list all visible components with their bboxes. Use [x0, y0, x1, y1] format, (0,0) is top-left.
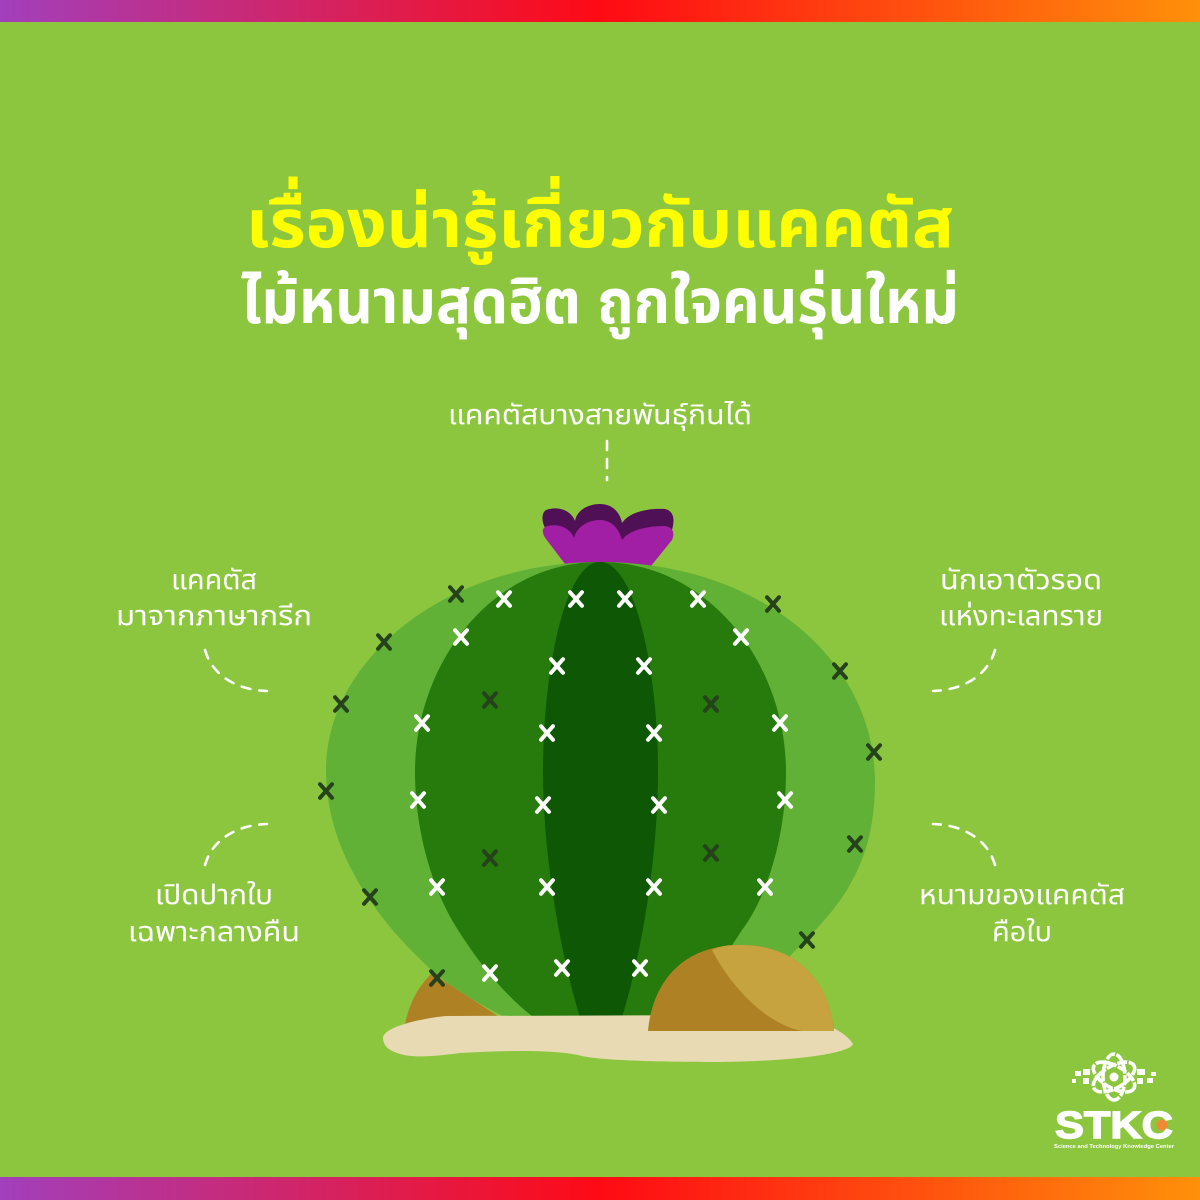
cactus body — [326, 562, 875, 1017]
logo wordmark: STKC — [1055, 1105, 1173, 1147]
logo accent dot — [1156, 1120, 1168, 1130]
icon: right rock — [648, 945, 834, 1031]
arrow: edible species — [606, 441, 608, 480]
white spines — [412, 592, 791, 980]
arrow: spines are leaves — [933, 824, 995, 865]
label: stomata open at night: เฉพาะกลางคืน — [128, 916, 300, 947]
subtitle: ไม้หนามสุดฮิต ถูกใจคนรุ่นใหม่ — [241, 268, 959, 340]
label: spines are leaves: คือใบ — [992, 916, 1052, 947]
label: greek origin: มาจากภาษากรีก — [116, 600, 312, 631]
top gradient bar — [0, 0, 1200, 22]
logo: STKC — [1054, 1054, 1175, 1150]
icon: left rock — [405, 973, 510, 1024]
icon: flower — [542, 504, 673, 566]
arrow: desert survivor — [933, 650, 995, 691]
label: greek origin — [116, 564, 312, 631]
arrow: greek origin — [205, 650, 267, 691]
label: stomata open at night: เปิดปากใบ — [155, 879, 273, 910]
label: greek origin: แคคตัส — [171, 564, 257, 595]
cactus illustration — [320, 504, 880, 1062]
sand base — [383, 1015, 853, 1062]
bottom gradient bar — [0, 1177, 1200, 1200]
icon: atom — [1072, 1054, 1156, 1100]
label: spines are leaves: หนามของแคคตัส — [919, 879, 1125, 910]
dark spines — [320, 587, 880, 985]
logo tagline: Science and Technology Knowledge Center — [1054, 1144, 1175, 1150]
label: desert survivor — [939, 564, 1103, 631]
label: edible species: แคคตัสบางสายพันธุ์กินได้ — [448, 399, 752, 431]
arrow: stomata open at night — [205, 824, 267, 865]
label: stomata open at night — [128, 879, 300, 947]
label: spines are leaves — [919, 879, 1125, 947]
label: desert survivor: แห่งทะเลทราย — [939, 600, 1103, 631]
label: desert survivor: นักเอาตัวรอด — [940, 564, 1102, 595]
title: เรื่องน่ารู้เกี่ยวกับแคคตัส — [246, 176, 954, 265]
